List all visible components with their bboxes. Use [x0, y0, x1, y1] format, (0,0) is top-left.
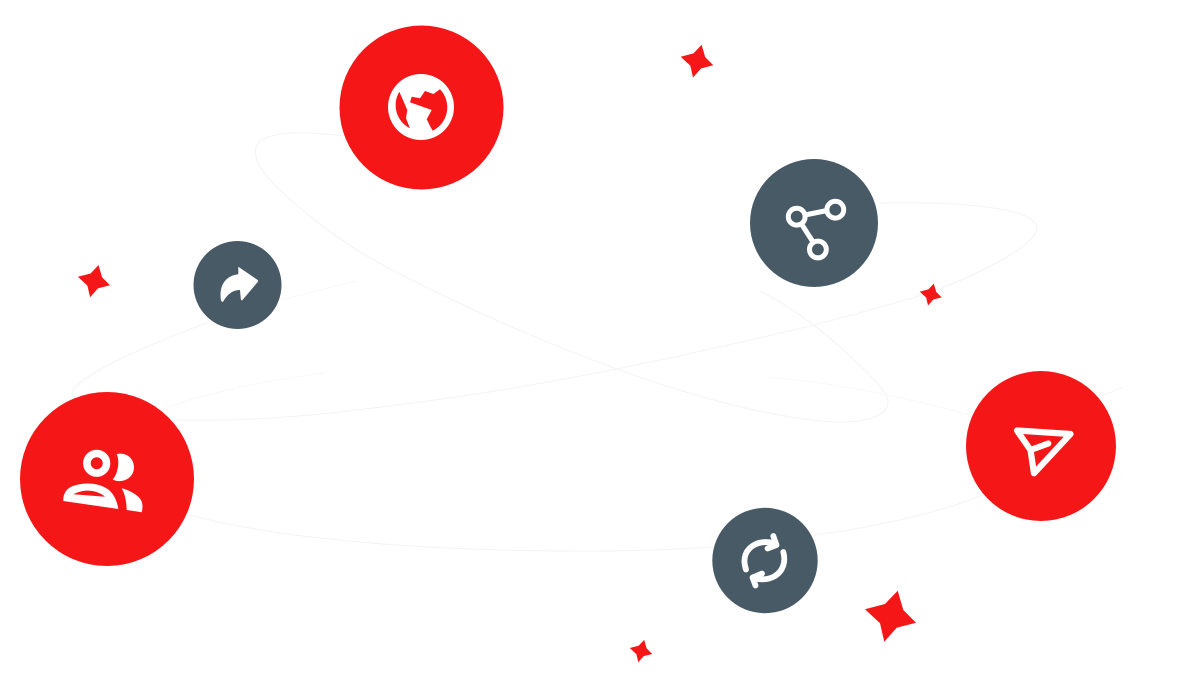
connecting orbit lines [72, 133, 1123, 551]
icon: network share in slate circle [750, 159, 878, 287]
decorative sparkle: top [681, 45, 713, 77]
decorative sparkle: small bottom [630, 640, 652, 662]
icon: people in red circle [20, 392, 194, 566]
decorative sparkle: large bottom [865, 591, 916, 642]
icon: globe in red circle [340, 26, 504, 190]
icon: paper plane in red circle [966, 371, 1116, 521]
decorative sparkle: right [920, 284, 942, 306]
icon: refresh in slate circle [712, 508, 818, 613]
icon: share arrow in slate circle [194, 241, 282, 329]
decorative sparkle: left [78, 265, 110, 297]
